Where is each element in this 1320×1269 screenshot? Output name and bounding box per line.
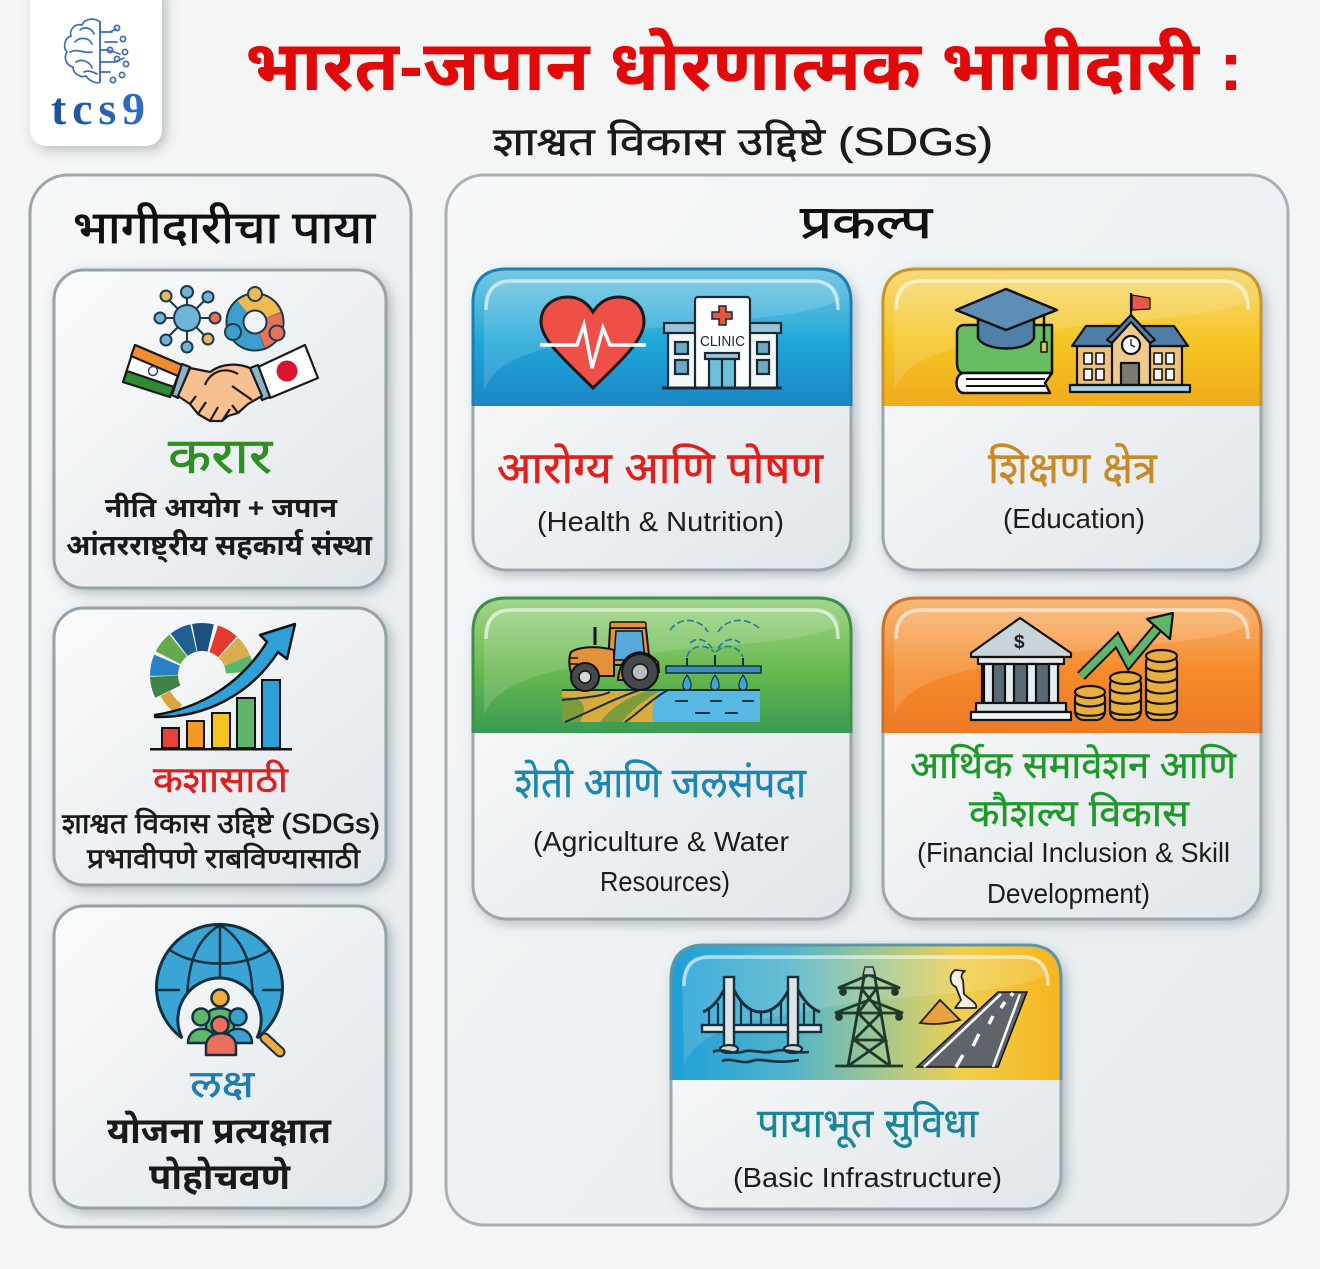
- icon: tractor with irrigation: [562, 620, 761, 722]
- label: financial inclusion and skill development: [910, 743, 1237, 835]
- text: agreement parties: नीति आयोग + जपान: [105, 493, 338, 523]
- label: education: शिक्षण क्षेत्र: [988, 442, 1158, 493]
- text: purpose detail: [62, 807, 380, 874]
- icon: suspension bridge: [702, 977, 821, 1062]
- label: Financial Inclusion & Skill Development: Development): [987, 878, 1150, 909]
- label: Agriculture & Water Resources: (Agriculture & Water: [533, 826, 789, 857]
- logo: tcs9: [30, 0, 162, 146]
- label: health and nutrition: आरोग्य आणि पोषण: [497, 443, 824, 493]
- card: financial inclusion and skill development: [883, 598, 1261, 919]
- card: goal: [54, 906, 386, 1208]
- icon: heart with pulse: [540, 297, 646, 388]
- text: agreement parties: आंतरराष्ट्रीय सहकार्य संस्था: [66, 529, 372, 563]
- label: financial inclusion and skill development: आर्थिक समावेशन आणि: [910, 743, 1237, 787]
- icon: handshake with flags of India and Japan: [123, 345, 318, 421]
- subtitle: शाश्वत विकास उद्दिष्टे (SDGs): [493, 120, 993, 164]
- label: Health & Nutrition: (Health & Nutrition): [537, 506, 784, 537]
- card: agreement: [54, 270, 386, 588]
- card: agriculture and water: [473, 598, 851, 919]
- panel: projects: [446, 175, 1288, 1225]
- text: agreement parties: [66, 493, 372, 563]
- label: Basic Infrastructure: (Basic Infrastructure): [733, 1162, 1002, 1193]
- icon: SDG colour ring with rising arrow and bars: [145, 618, 295, 750]
- icon: network and people: [154, 286, 284, 352]
- logo: tcs9: tcs9: [51, 83, 145, 134]
- text: goal detail: पोहोचवणे: [149, 1155, 291, 1197]
- text: purpose detail: प्रभावीपणे राबविण्यासाठी: [87, 842, 361, 874]
- label: Financial Inclusion & Skill Development: [917, 837, 1230, 909]
- card: education: [883, 269, 1261, 570]
- card: health and nutrition: [473, 269, 851, 570]
- label: Agriculture & Water Resources: Resources): [600, 866, 730, 897]
- text: goal detail: [107, 1110, 332, 1197]
- heading: foundation: भागीदारीचा पाया: [73, 202, 376, 253]
- label: agreement: करार: [168, 428, 274, 484]
- title: भारत-जपान धोरणात्मक भागीदारी :: [245, 27, 1243, 105]
- icon: clinic building: CLINIC: [700, 334, 745, 350]
- text: purpose detail: शाश्वत विकास उद्दिष्टे (SDGs): [62, 807, 380, 839]
- card: purpose: [54, 608, 386, 885]
- label: Education: (Education): [1003, 503, 1145, 534]
- label: financial inclusion and skill development: कौशल्य विकास: [969, 791, 1190, 835]
- icon: graduation cap on book: [956, 289, 1057, 393]
- label: basic infrastructure: पायाभूत सुविधा: [757, 1101, 979, 1148]
- icon: power transmission tower: [835, 967, 903, 1066]
- panel: foundation of partnership: [30, 175, 411, 1227]
- icon: school building: [1070, 293, 1190, 392]
- label: purpose: कशासाठी: [153, 759, 289, 800]
- heading: projects: प्रकल्प: [800, 196, 933, 248]
- icon: rising arrow and coin stacks: [1075, 613, 1177, 720]
- icon: bank: $: [1014, 632, 1025, 653]
- text: goal detail: योजना प्रत्यक्षात: [107, 1110, 332, 1151]
- icon: globe, people and magnifier: [155, 924, 285, 1055]
- card: basic infrastructure: [671, 945, 1061, 1209]
- icon: bank: [971, 618, 1071, 720]
- icon: clinic building: [662, 297, 782, 388]
- label: Financial Inclusion & Skill Development: (Financial Inclusion & Skill: [917, 837, 1230, 868]
- label: agriculture and water: शेती आणि जलसंपदा: [515, 759, 807, 806]
- icon: road and sand pile: [917, 970, 1027, 1067]
- label: goal: लक्ष: [190, 1064, 255, 1106]
- label: Agriculture & Water Resources: [533, 826, 789, 897]
